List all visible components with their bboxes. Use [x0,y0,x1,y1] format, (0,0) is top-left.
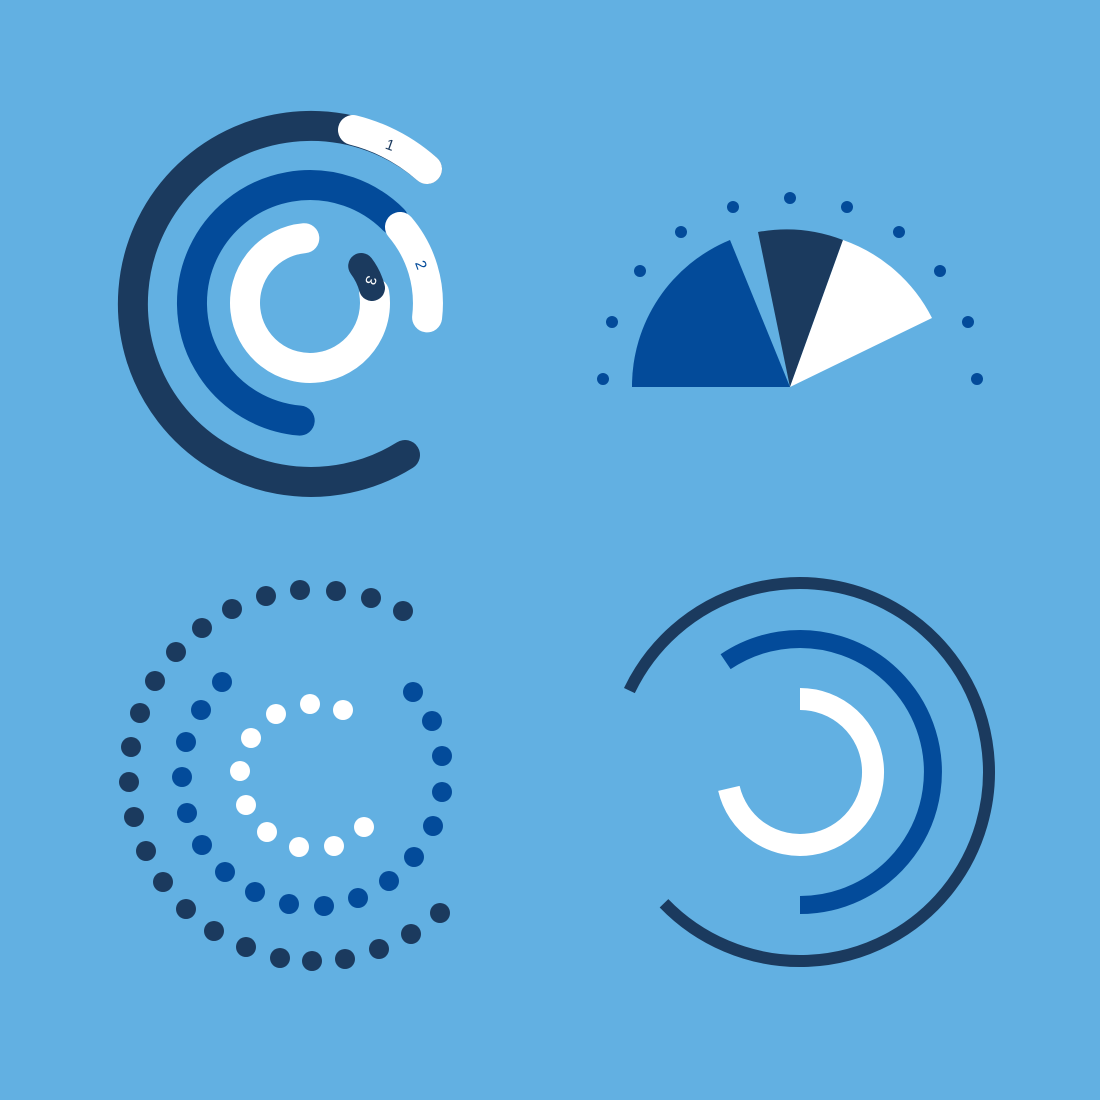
dotted ring dark [119,580,450,971]
dotted ring blue [172,672,452,916]
ring 2 blue [192,185,393,421]
chart: concentric progress rings (top-left) [133,126,430,482]
label 2: 2 [411,258,430,272]
ring 1 outer dark [133,126,427,482]
wedge white [790,240,932,387]
chart: semicircle pie with dots (top-right) [597,192,983,387]
ring 2 white segment [400,227,428,317]
arc dark [629,583,989,961]
chart: thin concentric arcs (bottom-right) [629,583,989,961]
label 1: 1 [383,136,397,155]
label 3: 3 [361,273,380,287]
ring 3 white [245,238,375,368]
chart: dotted spiral rings (bottom-left) [119,580,452,971]
wedge dark [758,229,843,387]
ring 1 white segment [353,130,427,169]
dotted ring white [230,694,374,857]
arc white [729,699,873,845]
wedge blue [632,240,790,387]
arc blue [726,639,933,905]
ring 3 dark segment [361,266,372,288]
dots arc [597,192,983,385]
